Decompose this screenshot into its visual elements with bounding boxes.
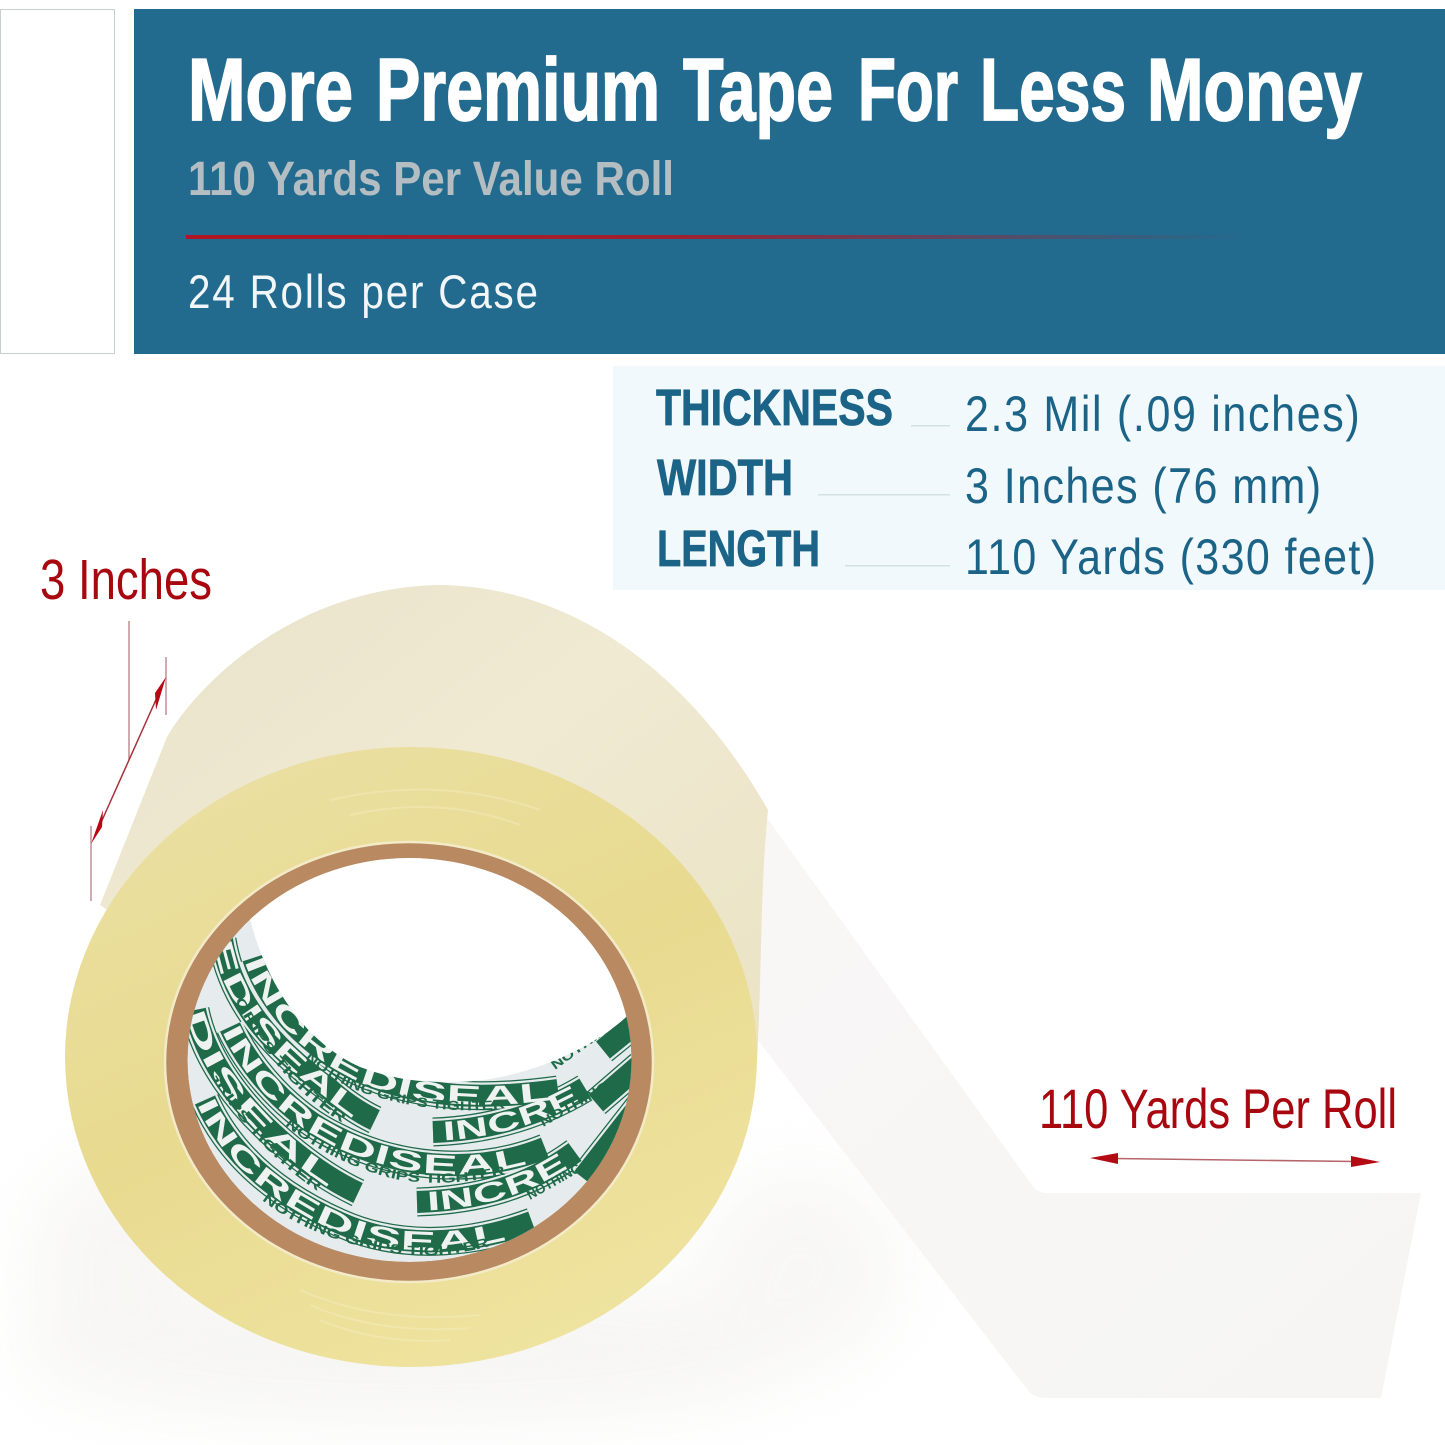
- core interior: NOTHING: [541, 1082, 603, 1126]
- left blank panel: [0, 10, 114, 354]
- width value: 3 Inches (76 mm): [965, 458, 1321, 514]
- title: Premium: [376, 40, 660, 139]
- title: Money: [1147, 40, 1362, 139]
- title: More: [188, 40, 353, 139]
- cardboard core: [165, 842, 653, 1282]
- title: For: [858, 40, 958, 139]
- arrow: [1115, 1158, 1355, 1162]
- core interior: [188, 858, 632, 1262]
- core interior: INCREDISEAL: [224, 1026, 526, 1175]
- open hole: [250, 858, 626, 1082]
- arrow: [95, 684, 163, 836]
- thickness value: 2.3 Mil (.09 inches): [965, 386, 1360, 442]
- title: Less: [980, 40, 1126, 139]
- core interior: NOTHING GRIPS TIGHTER: [262, 1194, 489, 1255]
- core interior: INCREDISEAL: [198, 1098, 505, 1251]
- core interior: DISEAL: [190, 1011, 328, 1187]
- core interior: GRIPS TIGHTER: [214, 1075, 320, 1191]
- roll face: [65, 747, 757, 1367]
- core interior: INCREDISEAL: [246, 958, 550, 1105]
- red divider: [186, 235, 1246, 239]
- title: Tape: [683, 40, 833, 139]
- label: 3 Inches: [40, 548, 212, 612]
- rolls per case: 24 Rolls per Case: [188, 266, 538, 319]
- core interior: GRIPS TIGHTER: [237, 998, 345, 1122]
- film texture: [300, 790, 540, 1341]
- core interior: EDISEAL: [217, 941, 354, 1118]
- thickness label: THICKNESS: [656, 379, 893, 436]
- core interior: NOTHING: [526, 1164, 578, 1200]
- length value: 110 Yards (330 feet): [965, 529, 1376, 585]
- subtitle: 110 Yards Per Value Roll: [188, 153, 674, 206]
- roll body: [100, 585, 768, 1100]
- core interior: NOTHING GRIPS TIGHTER: [306, 1054, 505, 1110]
- tape roll: [65, 585, 768, 1367]
- panel: specifications: [613, 366, 1445, 590]
- dimension: 3 inches: [40, 548, 212, 901]
- dimension: 110 yards: [1039, 1077, 1397, 1167]
- title: [188, 40, 1362, 139]
- length label: LENGTH: [657, 520, 820, 577]
- core interior: INCRE: [445, 1086, 579, 1140]
- core interior: INCRE: [430, 1153, 567, 1210]
- header panel: [134, 9, 1445, 354]
- brand bands: [195, 940, 640, 1241]
- width label: WIDTH: [657, 449, 793, 506]
- core interior: NOTHING: [550, 1026, 614, 1070]
- soft shadow under roll: [20, 1160, 900, 1420]
- tape strip: [750, 815, 1421, 1398]
- core interior: NOTHING GRIPS TIGHTER: [286, 1120, 506, 1183]
